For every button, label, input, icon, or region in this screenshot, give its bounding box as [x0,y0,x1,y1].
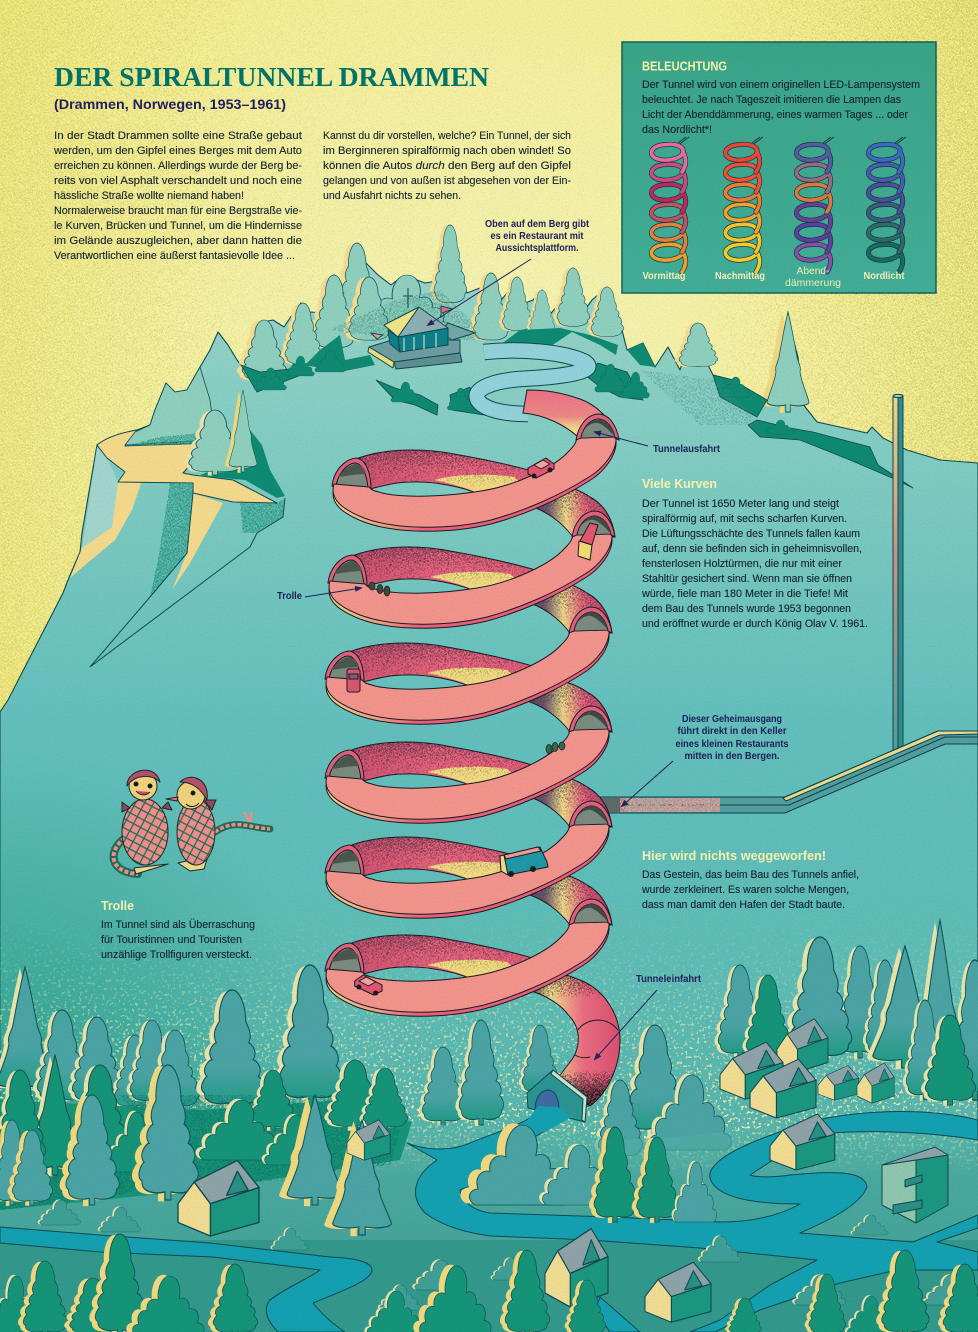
winding road on the summit [477,350,588,414]
callout: Geheimausgang: eines kleinen Restaurants [676,739,789,750]
text block: Viele Kurven [641,476,868,630]
Viele Kurven body: Der Tunnel ist 1650 Meter lang und steigt [642,498,839,510]
spiral tunnel [325,390,620,1106]
spiral labels: dämmerung [785,278,841,289]
Hier wird nichts weggeworfen body: Das Gestein, das beim Bau des Tunnels anfiel, [642,869,859,881]
text block: Hier wird nichts weggeworfen [641,848,859,911]
callout: restaurant: es ein Restaurant mit [490,231,584,242]
small bushes on the forest floor [38,1200,976,1310]
Trolle body: unzählige Trollfiguren versteckt. [101,949,252,961]
intro text column 2: können die Autos durch den Berg auf den Gipfel [323,160,571,172]
mini spiral: Abenddämmerung [796,137,834,272]
mini spiral: Nordlicht [868,137,906,272]
car on coil 6 [355,975,382,995]
callout: restaurant: Oben auf dem Berg gibt [485,219,590,230]
tunnel exit section at the top [523,390,617,438]
troll figures [114,770,270,874]
apartment block [882,1147,948,1223]
intro text column 1: erreichen zu können. Allerdings wurde der Berg be- [54,160,302,172]
intro text column 2: im Berginneren spiralförmig nach oben windet! So [323,145,571,157]
braid of troll one [114,838,138,874]
car in tunnel mouth on coil 3 [347,669,360,692]
callout: Tunnelausfahrt [595,432,721,455]
Trolle body: Im Tunnel sind als Überraschung [101,919,255,931]
trolls on coil 4 [546,742,565,754]
Hier wird nichts weggeworfen body: dass man damit den Hafen der Stadt baute. [642,899,845,911]
left forest trees, middle row [0,1055,408,1236]
intro text column 2: gelangen und von außen ist abgesehen von der Ein- [323,175,571,187]
tunnel coil 6 [325,871,612,1016]
callout: restaurant [428,219,590,325]
callout: Geheimausgang [622,714,789,806]
intro text column 2 [323,130,571,202]
Viele Kurven body [641,498,868,630]
Hier wird nichts weggeworfen body [641,869,859,911]
back row of forest trees, right [594,920,978,1161]
intro text column 1: im Gelände auszugleichen, aber dann hatten die [54,235,302,247]
Viele Kurven body: fensterlosen Holztürmen, die nur mit einer [642,558,842,570]
mini spiral: Nachmittag [725,137,763,272]
panel text: beleuchtet. Je nach Tageszeit imitieren die Lampen das [642,94,901,106]
mountain-top forest ridge [237,225,913,488]
spiral labels [642,266,905,289]
Viele Kurven body: Die Lüftungsschächte des Tunnels fallen kaum [642,528,860,540]
panel text [642,79,920,136]
troll one [122,770,172,874]
panel text: Licht der Abenddämmerung, eines warmen Tages ... oder [642,109,908,121]
callout: Trolle: Trolle [277,591,302,602]
back row of forest trees, left [0,965,559,1126]
Viele Kurven body: dem Bau des Tunnels wurde 1953 begonnen [642,603,851,615]
intro text column 1: hässliche Straße wollte niemand haben! [54,190,244,202]
vertical ventilation tower [893,394,903,751]
text block: Trolle [101,898,255,961]
callout: Tunneleinfahrt [595,974,702,1059]
tunnel coil 3 [325,579,612,724]
callout: Trolle [277,588,361,602]
houses in the lower forest [178,1120,711,1322]
tunnel coil 5 [325,773,612,918]
bus in tunnel mouth on coil 2 [578,523,598,560]
restaurant on the summit [368,288,475,369]
Viele Kurven body: auf, denn sie befinden sich in geheimnisvollen, [642,543,862,555]
arrow: Trolle [305,588,361,597]
callout: Geheimausgang: führt direkt in den Keller [678,726,787,737]
tunnel entrance portal [520,1070,587,1132]
intro text column 2: und Ausfahrt nichts zu sehen. [323,190,461,202]
sky speckle texture [0,0,978,720]
spiral labels: Nachmittag [715,271,765,282]
intro text column 2: Kannst du dir vorstellen, welche? Ein Tunnel, der sich [323,130,571,142]
panel text: Der Tunnel wird von einem originellen LED-Lampensystem [642,79,920,91]
arrow: Tunneleinfahrt [595,990,657,1059]
trolls on coil 2 [369,582,390,596]
Trolle body: für Touristinnen und Touristen [101,934,242,946]
panel: Beleuchtung [622,42,936,293]
intro text column 1: Verantwortlichen eine äußerst fantasievolle Idee ... [54,250,295,262]
callout: Geheimausgang: mitten in den Bergen. [684,751,780,762]
panel heading: BELEUCHTUNG [642,58,727,74]
spiral labels: Nordlicht [864,271,905,282]
callout: Tunneleinfahrt: Tunneleinfahrt [636,974,702,985]
tunnel coil 1 [332,414,619,531]
river road system [0,1097,978,1332]
intro text column 1: le Kurven, Brücken und Tunnel, um die Hindernisse [54,220,302,232]
arrow: Tunnelausfahrt [595,432,648,446]
car on coil 1 [528,458,554,478]
text block: Hier wird nichts weggeworfen: Hier wird nichts weggeworfen! [642,848,826,863]
callout: Tunnelausfahrt: Tunnelausfahrt [653,444,721,455]
lower tunnel section leading to the entrance [528,974,620,1106]
village houses [720,1019,894,1170]
callout: restaurant: Aussichtsplattform. [496,243,579,254]
vehicles and little trolls in the tunnel [347,458,598,995]
callout: Geheimausgang: Dieser Geheimausgang [682,714,782,725]
Hier wird nichts weggeworfen body: wurde zerkleinert. Es waren solche Mengen, [641,884,849,896]
arrow: Geheimausgang [622,761,673,806]
secret exit passage [597,731,978,813]
subtitle: (Drammen, Norwegen, 1953–1961) [54,96,286,112]
spiral labels: Vormittag [642,271,686,282]
Viele Kurven body: Stahltür gesichert sind. Wenn man sie öffnen [642,573,852,585]
cliff on the left side of the mountain [70,367,285,667]
arrow: restaurant [428,259,531,325]
mini spiral: Vormittag [651,137,689,272]
bus on coil 5 [500,847,548,876]
spiral labels: Abend- [796,266,830,277]
troll two [166,777,216,871]
title: DER SPIRALTUNNEL DRAMMEN [54,62,490,92]
panel text: das Nordlicht*! [642,124,712,136]
intro text column 1: reits von viel Asphalt verschandelt und noch eine [54,175,302,187]
intro text column 1: In der Stadt Drammen sollte eine Straße gebaut [54,130,302,142]
tunnel coil 2 [328,483,615,628]
Viele Kurven body: und eröffnet wurde er durch König Olav V. 1961. [642,618,868,630]
text block: Viele Kurven: Viele Kurven [642,476,717,491]
Viele Kurven body: spiralförmig auf, mit sechs scharfen Kurven. [642,513,847,525]
text block: Trolle: Trolle [101,898,134,913]
foreground forest trees [0,1234,978,1332]
tunnel coil 4 [325,678,612,823]
intro text column 1 [53,130,302,262]
intro text column 1: werden, um den Gipfel eines Berges mit dem Auto [53,145,302,157]
right forest trees, front row [460,1123,717,1223]
braid of troll two [215,825,270,832]
Viele Kurven body: würde, fiele man 180 Meter in die Tiefe! Mit [641,588,848,600]
forest ground [0,1095,978,1332]
Trolle body [101,919,255,961]
intro text column 1: Normalerweise braucht man für eine Bergstraße vie- [54,205,302,217]
